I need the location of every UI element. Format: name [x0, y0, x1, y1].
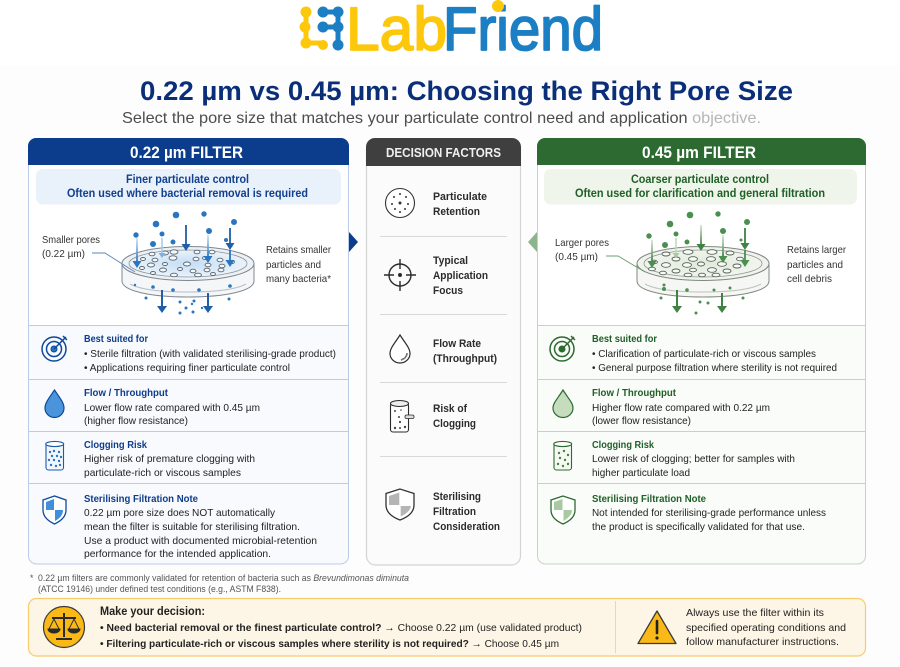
row: flow / throughput: Lower flow rate compared with 0.45 µm	[84, 402, 260, 414]
summary box: coarser control: Coarser particulate control	[631, 174, 769, 186]
summary box: finer control: Finer particulate control	[126, 174, 249, 186]
factor: sterilising filtration consideration: Filtration	[433, 506, 476, 518]
logo	[300, 0, 603, 63]
title: 0.22 µm vs 0.45 µm: Choosing the Right Pore Size	[140, 76, 793, 106]
row: sterilising filtration note: Sterilising Filtration Note	[592, 493, 706, 505]
row: sterilising filtration note: performance for the intended application.	[84, 548, 271, 560]
decision banner	[28, 598, 866, 656]
row: flow / throughput: (higher flow resistance)	[84, 415, 188, 427]
row: sterilising filtration note: mean the filter is suitable for sterilising filtration.	[84, 521, 300, 533]
summary box: finer control: Often used where bacterial removal is required	[67, 188, 308, 200]
icon: clogged jar	[46, 441, 64, 470]
decision text: Make your decision:	[100, 606, 205, 618]
label: smaller pores	[42, 234, 100, 260]
summary box: finer control	[36, 169, 341, 204]
leader line	[606, 256, 645, 272]
row: best suited for: Best suited for	[592, 333, 657, 345]
label: retains larger particles: Retains larger	[787, 244, 846, 256]
factor: typical application focus	[384, 255, 488, 297]
summary box: coarser control: Often used for clarification and general filtration	[575, 188, 825, 200]
icon: warning triangle	[638, 611, 676, 644]
panel: 0.45 µm filter	[537, 138, 866, 564]
footnote: (ATCC 19146) under defined test conditions (e.g., ASTM F838).	[38, 584, 281, 594]
row: clogging risk: Clogging Risk	[84, 439, 147, 451]
factor: particulate retention: Particulate	[433, 191, 487, 203]
icon: balance scales	[44, 606, 84, 648]
row: clogging risk: Lower risk of clogging; better for samples with	[592, 453, 795, 465]
row: best suited for: • Sterile filtration (with validated sterilising-grade product)	[84, 348, 336, 360]
row: sterilising filtration note	[551, 493, 826, 533]
logo mark	[300, 6, 344, 50]
row: best suited for	[550, 333, 837, 374]
row: clogging risk: particulate-rich or viscous samples	[84, 467, 241, 479]
factor: particulate retention	[386, 188, 487, 218]
factor: sterilising filtration consideration: Consideration	[433, 521, 500, 533]
warning text: follow manufacturer instructions.	[686, 636, 839, 648]
icon: shield	[43, 496, 66, 524]
leader line	[92, 253, 135, 272]
factor: typical application focus: Focus	[433, 285, 463, 297]
arrow: towards 0.22 µm panel	[349, 232, 358, 252]
icon: target	[550, 336, 575, 361]
label: larger pores: Larger pores	[555, 237, 609, 249]
factor: risk of clogging	[390, 400, 476, 432]
icon: grey shield	[386, 489, 414, 520]
header: 0.45 µm filter: 0.45 µm FILTER	[642, 144, 756, 162]
warning text: specified operating conditions and	[686, 622, 846, 634]
row: clogging risk	[46, 439, 255, 479]
logo wordmark	[346, 0, 603, 63]
icon: outline jar	[390, 400, 414, 432]
label: retains smaller particles: many bacteria*	[266, 273, 331, 285]
row: flow / throughput: Flow / Throughput	[592, 387, 676, 399]
factor: flow rate	[390, 335, 497, 365]
label: retains larger particles: cell debris	[787, 273, 832, 285]
subtitle: Select the pore size that matches your particulate control need and application objective.	[122, 110, 761, 127]
header: 0.22 µm filter	[28, 138, 349, 165]
factor: flow rate: Flow Rate	[433, 338, 481, 350]
decision text: • Filtering particulate-rich or viscous samples where sterility is not required? → Choose 0.45 µm	[100, 638, 559, 650]
row: sterilising filtration note: 0.22 µm pore size does NOT automatically	[84, 507, 276, 519]
warning text: Always use the filter within its	[686, 607, 824, 619]
label: retains smaller particles	[266, 244, 331, 285]
factor: flow rate: (Throughput)	[433, 353, 497, 365]
label: smaller pores: Smaller pores	[42, 234, 100, 246]
row: best suited for	[42, 333, 336, 374]
warning text	[686, 607, 846, 648]
factor: particulate retention: Retention	[433, 206, 480, 218]
decision text	[100, 606, 582, 650]
label: smaller pores: (0.22 µm)	[42, 248, 85, 260]
row: sterilising filtration note	[43, 493, 317, 560]
icon: outline drop	[390, 335, 410, 363]
header: 0.45 µm filter	[537, 138, 866, 165]
row: best suited for: • Applications requiring finer particulate control	[84, 362, 290, 374]
icon: water drop	[553, 390, 573, 418]
summary box: coarser control	[544, 169, 857, 204]
footnote: 0.22 µm filters are commonly validated for retention of bacteria such as Brevundimonas diminuta	[38, 573, 409, 583]
row: sterilising filtration note: Sterilising Filtration Note	[84, 493, 198, 505]
header: 0.22 µm filter: 0.22 µm FILTER	[130, 144, 243, 162]
header: decision factors: DECISION FACTORS	[386, 146, 501, 160]
label: larger pores	[555, 237, 609, 263]
label: retains smaller particles: Retains smaller	[266, 244, 331, 256]
panel: 0.22 µm filter	[28, 138, 349, 564]
row: clogging risk: Higher risk of premature clogging with	[84, 453, 255, 465]
row: flow / throughput	[45, 387, 260, 427]
header: decision factors	[366, 138, 521, 166]
row: clogging risk	[554, 439, 795, 479]
row: sterilising filtration note: Not intended for sterilising-grade performance unless	[592, 507, 826, 519]
row: flow / throughput: Flow / Throughput	[84, 387, 168, 399]
factor: risk of clogging: Clogging	[433, 418, 476, 430]
panel: decision factors	[366, 138, 521, 565]
icon: clogged jar	[554, 441, 572, 470]
row: sterilising filtration note: the product is specifically validated for that use.	[592, 521, 805, 533]
icon: crosshair	[384, 259, 416, 291]
icon: particles in circle	[386, 188, 414, 218]
label: retains larger particles	[787, 244, 846, 285]
row: best suited for: • Clarification of particulate-rich or viscous samples	[592, 348, 816, 360]
factor: typical application focus: Application	[433, 270, 488, 282]
icon: target	[42, 336, 67, 361]
footnote: *	[30, 573, 34, 583]
logo i dot	[492, 0, 504, 12]
row: flow / throughput: (lower flow resistance)	[592, 415, 691, 427]
label: retains larger particles: particles and	[787, 259, 843, 271]
decision text: • Need bacterial removal or the finest particulate control? → Choose 0.22 µm (use validated product)	[100, 622, 582, 634]
row: sterilising filtration note: Use a product with documented microbial-retention	[84, 535, 317, 547]
row: flow / throughput	[553, 387, 770, 427]
factor: sterilising filtration consideration: Sterilising	[433, 491, 481, 503]
factor: sterilising filtration consideration	[386, 489, 500, 533]
arrow: towards 0.45 µm panel	[528, 232, 537, 252]
footnote	[30, 573, 409, 594]
illustration: 0.22 µm membrane disc	[92, 211, 254, 314]
row: clogging risk: Clogging Risk	[592, 439, 654, 451]
row: flow / throughput: Higher flow rate compared with 0.22 µm	[592, 402, 770, 414]
illustration: 0.45 µm membrane disc	[606, 211, 769, 314]
icon: water drop	[45, 390, 64, 418]
label: larger pores: (0.45 µm)	[555, 251, 598, 263]
factor: risk of clogging: Risk of	[433, 403, 467, 415]
row: best suited for: • General purpose filtration where sterility is not required	[592, 362, 837, 374]
icon: shield	[551, 496, 575, 524]
row: clogging risk: higher particulate load	[592, 467, 690, 479]
factor: typical application focus: Typical	[433, 255, 468, 267]
row: best suited for: Best suited for	[84, 333, 148, 345]
label: retains smaller particles: particles and	[266, 259, 321, 271]
